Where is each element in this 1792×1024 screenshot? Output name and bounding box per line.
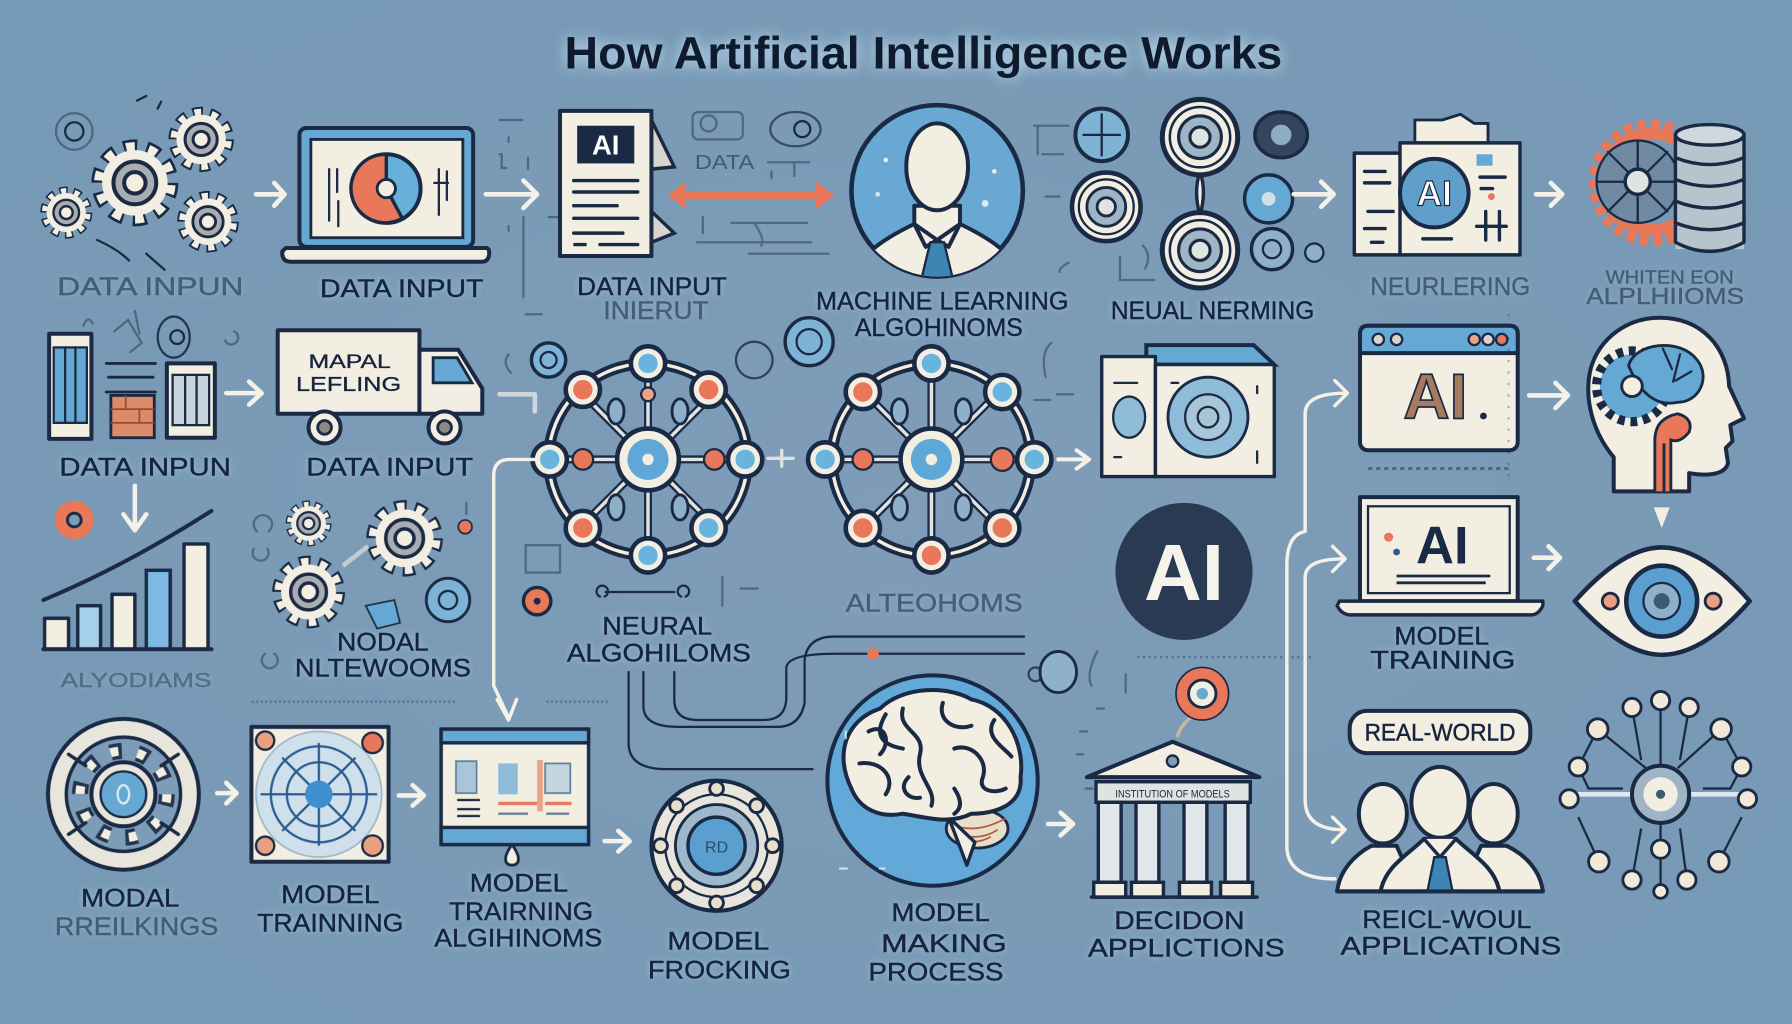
icon: buildings <box>49 311 238 439</box>
title: How Artificial Intelligence Works <box>565 28 1282 79</box>
icon: monitor <box>441 729 589 865</box>
labels: NEUAL NERMING <box>1111 297 1314 325</box>
icon: laptop with pie chart <box>282 128 489 262</box>
labels: FROCKING <box>648 956 791 984</box>
icon: delivery truck: MAPAL <box>309 351 391 373</box>
arrow heads: double red <box>667 182 834 209</box>
icon: people group <box>1337 767 1543 891</box>
pill: real-world <box>1350 711 1530 753</box>
labels: MODEL <box>1394 623 1489 651</box>
icon: model ring <box>651 781 782 911</box>
labels: PROCESS <box>869 959 1003 987</box>
labels: NEURLERING <box>1370 273 1530 301</box>
icon: temple <box>1087 742 1259 897</box>
labels: DATA INPUT <box>306 453 473 481</box>
labels: TRAINNING <box>257 909 403 937</box>
dotted caption <box>1368 467 1509 470</box>
icon: delivery truck: LEFLING <box>296 373 401 396</box>
arrow <box>1536 183 1562 206</box>
connector: hub to monitor <box>494 459 535 720</box>
labels: DATA INPUN <box>57 273 243 301</box>
labels: APPLICTIONS <box>1088 935 1285 963</box>
icon: brain in circle <box>827 675 1038 886</box>
icon: AI browser window <box>1360 326 1518 450</box>
icon: neural hourglass rings <box>1034 99 1323 288</box>
labels: REICL-WOUL <box>1362 906 1531 934</box>
labels: MAKING <box>881 930 1007 958</box>
pill: real-world: REAL-WORLD <box>1365 720 1515 747</box>
icon: nodal gears <box>253 503 472 668</box>
floating badges around hubs <box>506 314 1073 615</box>
labels: NEURAL <box>602 612 712 640</box>
icon: AI browser window: AI <box>1403 360 1467 432</box>
small data gadgets: DATA <box>695 151 755 174</box>
icon: AI dashboard: AI <box>1417 174 1452 214</box>
labels: DATA INPUT <box>577 273 727 301</box>
dotted rules <box>251 701 608 703</box>
dotted vertical divider <box>1508 314 1510 480</box>
arrow <box>217 783 237 803</box>
labels: ALYODIAMS <box>61 669 211 692</box>
labels: INIERUT <box>603 297 709 325</box>
icon: model ring: RD <box>705 840 728 857</box>
labels: RREILKINGS <box>55 913 218 941</box>
labels: TRAINING <box>1370 647 1515 675</box>
neural network hub 1 <box>533 346 762 573</box>
labels: NLTEWOOMS <box>295 655 471 683</box>
arrow <box>399 785 424 806</box>
icon: growth bar chart <box>43 501 211 649</box>
icon: AI dark circle <box>1115 503 1253 640</box>
labels: DATA INPUT <box>320 275 483 303</box>
arrow <box>768 450 793 466</box>
labels: ALGOHILOMS <box>567 640 751 668</box>
icon: gear and database <box>1597 125 1744 251</box>
arrow: double red <box>677 192 825 198</box>
connector: branch to laptop and people <box>1305 546 1345 842</box>
icon: target gear dial <box>48 719 199 870</box>
icon: radial node network <box>1560 691 1757 898</box>
labels: MODEL <box>667 928 769 956</box>
arrow <box>256 183 285 206</box>
arrow <box>1529 383 1568 408</box>
labels: MODAL <box>81 884 179 912</box>
icon: AI dashboard <box>1354 114 1520 255</box>
arrow: down to eye <box>1654 507 1670 528</box>
labels: WHITEN EON <box>1606 266 1734 287</box>
labels: ALTEOHOMS <box>846 589 1023 617</box>
arrow <box>1058 450 1089 469</box>
connector: people to window <box>1287 381 1347 879</box>
arrow <box>605 831 630 851</box>
labels: MACHINE LEARNING <box>816 288 1069 316</box>
labels: MODEL <box>891 899 990 927</box>
icon: temple: INSTITUTION OF MODELS <box>1115 789 1230 801</box>
labels <box>55 266 1744 987</box>
labels: APPLICATIONS <box>1341 932 1561 960</box>
labels: ALPLHIIOMS <box>1586 283 1744 309</box>
icon: pin <box>1176 667 1229 737</box>
labels: MODEL <box>281 881 379 909</box>
arrow <box>486 181 537 208</box>
labels: NODAL <box>337 628 429 656</box>
arrow: down to chart <box>123 486 146 530</box>
icon: eye <box>1575 547 1750 655</box>
icon: AI dark circle: AI <box>1144 528 1224 617</box>
arrow <box>1048 813 1073 835</box>
icon: person in circle <box>851 105 1023 280</box>
neural network hub 2 <box>808 346 1051 573</box>
labels: DECIDON <box>1114 907 1245 935</box>
arrow <box>1294 182 1334 207</box>
labels: ALGOHINOMS <box>855 314 1023 342</box>
arrow <box>499 394 535 411</box>
icon: AI document: AI <box>592 129 619 160</box>
icon: AI document <box>560 111 674 256</box>
labels: ALGIHINOMS <box>434 924 602 952</box>
labels: TRAIRNING <box>449 898 593 926</box>
icon: head with brain <box>1588 318 1744 491</box>
arrow <box>1534 546 1560 569</box>
routing lines <box>629 637 1024 769</box>
icon: AI laptop <box>1337 497 1543 615</box>
floating bits near brain <box>1029 651 1314 789</box>
labels: DATA INPUN <box>59 453 231 481</box>
labels: MODEL <box>470 869 568 897</box>
small data gadgets <box>499 112 829 297</box>
arrow <box>226 382 262 405</box>
icon: AI folder panel <box>1102 345 1274 477</box>
icon: delivery truck <box>278 330 482 443</box>
icon: radar panel <box>251 727 389 862</box>
icon: gear cluster <box>45 96 234 270</box>
icon: AI laptop: AI <box>1416 516 1469 575</box>
